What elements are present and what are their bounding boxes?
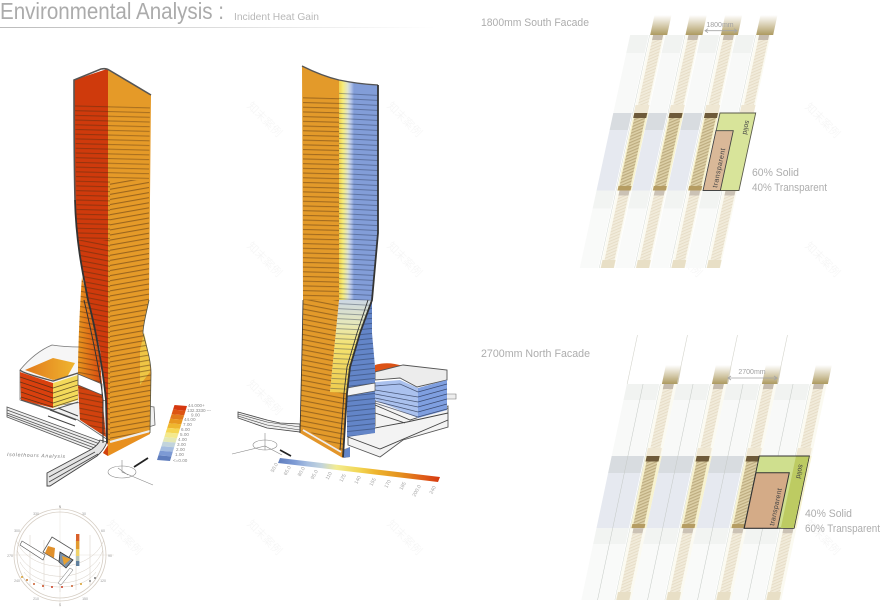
label: north solid: solid bbox=[794, 464, 804, 479]
right tower band bbox=[347, 383, 375, 396]
watermarks: 知末案例 bbox=[244, 377, 285, 418]
title block bbox=[0, 0, 435, 28]
legend labels: 2.00 bbox=[176, 447, 185, 452]
compass degree labels: 150 bbox=[82, 597, 88, 601]
legend labels: 1.00 bbox=[175, 452, 184, 457]
scale bar bbox=[278, 458, 440, 482]
solid area bbox=[703, 113, 756, 190]
lower red chunk bbox=[78, 385, 106, 437]
sun path dots bbox=[21, 576, 96, 588]
text: north percentages bbox=[805, 508, 880, 535]
legend labels: 132.3330 --- bbox=[187, 408, 211, 413]
watermarks: 知末案例 bbox=[244, 517, 285, 558]
base lip bbox=[103, 432, 150, 456]
scale labels bbox=[270, 462, 438, 498]
text: south percentages bbox=[752, 167, 827, 194]
watermarks: 知末案例 bbox=[104, 517, 145, 558]
right tower mid strip bbox=[330, 300, 372, 400]
compass degree labels: S bbox=[59, 603, 62, 607]
compass degree labels: N bbox=[59, 505, 62, 509]
left tower with podium bbox=[7, 69, 155, 486]
heading: south facade: 1800mm South Facade bbox=[481, 17, 589, 29]
compass degree labels: 210 bbox=[33, 597, 39, 601]
watermarks: 知末案例 bbox=[802, 239, 843, 280]
compass degree labels: 270 bbox=[7, 554, 13, 558]
scale labels: 50.0 bbox=[270, 462, 280, 474]
left legend bbox=[157, 403, 211, 463]
watermarks bbox=[104, 99, 843, 558]
scale labels: 95.0 bbox=[310, 469, 320, 481]
scale labels: 170 bbox=[384, 479, 393, 489]
transparent area bbox=[703, 131, 733, 190]
watermarks: 知末案例 bbox=[384, 239, 425, 280]
watermarks: 知末案例 bbox=[802, 517, 843, 558]
right colour scale bbox=[270, 458, 440, 498]
legend labels bbox=[173, 403, 211, 463]
yellow patch bbox=[140, 333, 150, 385]
legend labels: 9.00 bbox=[191, 412, 200, 418]
compass degree labels: 60 bbox=[101, 529, 105, 533]
dimension: 1800mm bbox=[705, 22, 737, 33]
text: south percentages: 60% Solid bbox=[752, 167, 799, 179]
sun path diagram bbox=[7, 505, 114, 607]
label: north transparent: transparent bbox=[769, 488, 784, 526]
right tower with podium bbox=[238, 66, 456, 458]
transparent area bbox=[744, 473, 789, 528]
heading: north facade: 2700mm North Facade bbox=[481, 348, 590, 360]
scale labels: 140 bbox=[354, 475, 363, 485]
legend labels: 6.00 bbox=[181, 427, 190, 432]
subtitle: Incident Heat Gain bbox=[234, 12, 319, 23]
right tower gradient strip bbox=[339, 80, 378, 300]
scale labels: 80.0 bbox=[297, 466, 307, 478]
legend labels: 3.00 bbox=[177, 442, 186, 447]
label: south solid: solid bbox=[741, 120, 750, 135]
compass degree labels: 240 bbox=[14, 579, 20, 583]
scale labels: 240 bbox=[429, 485, 438, 495]
title rule bbox=[0, 27, 435, 28]
text: north percentages: 40% Solid bbox=[805, 508, 852, 520]
legend labels: 7.00 bbox=[183, 422, 192, 427]
lower left tower chunk bbox=[78, 277, 102, 385]
right tower lower blue face bbox=[347, 300, 375, 437]
left caption: Isolethours Analysis bbox=[7, 452, 66, 460]
left podium block bbox=[20, 358, 78, 410]
scale labels: 110 bbox=[325, 471, 334, 481]
dimension: 2700mm bbox=[728, 369, 777, 380]
watermarks: 知末案例 bbox=[244, 99, 285, 140]
white band bbox=[78, 374, 102, 395]
scale labels: 185 bbox=[399, 481, 408, 491]
watermarks: 知末案例 bbox=[384, 517, 425, 558]
scale labels: 65.0 bbox=[283, 465, 293, 477]
legend labels: 5.00 bbox=[180, 432, 189, 437]
left compass bbox=[108, 458, 153, 485]
dimension: 1800mm: 1800mm bbox=[706, 22, 734, 29]
left podium and roads bbox=[7, 345, 155, 486]
panel: north facade modules bbox=[581, 335, 838, 600]
label: south transparent: transparent bbox=[712, 148, 727, 188]
compass degree labels bbox=[7, 505, 112, 607]
tower outlines bbox=[74, 69, 151, 443]
compass degree labels: 120 bbox=[100, 579, 106, 583]
site plan bbox=[20, 537, 73, 585]
solid darker strip bbox=[781, 456, 809, 528]
scale labels: 200.0 bbox=[412, 484, 423, 498]
left tower red face bbox=[74, 69, 110, 445]
floor lines bbox=[75, 103, 151, 440]
watermarks: 知末案例 bbox=[384, 99, 425, 140]
watermarks: 知末案例 bbox=[244, 239, 285, 280]
compass degree labels: 90 bbox=[108, 554, 112, 558]
right compass bbox=[232, 433, 291, 456]
right tower base lip bbox=[301, 428, 350, 458]
watermarks: 知末案例 bbox=[664, 239, 705, 280]
text: south percentages: 40% Transparent bbox=[752, 182, 827, 194]
solid area bbox=[744, 456, 809, 528]
legend labels: 44.00 bbox=[184, 417, 196, 422]
right tower floor lines bbox=[300, 92, 378, 452]
legend labels: 44.000+ bbox=[188, 403, 205, 408]
legend labels: 4.00 bbox=[178, 437, 187, 442]
scale labels: 125 bbox=[339, 473, 348, 483]
compass degree labels: 330 bbox=[33, 512, 39, 516]
sky dome rings bbox=[10, 505, 114, 607]
panel: south facade modules bbox=[580, 15, 777, 268]
right podium blue facade bbox=[375, 380, 456, 418]
right podium and road bbox=[238, 363, 448, 457]
compass degree labels: 30 bbox=[82, 512, 86, 516]
legend labels: <=0.00 bbox=[173, 458, 188, 463]
scale labels: 155 bbox=[369, 477, 378, 487]
watermarks: 知末案例 bbox=[802, 100, 843, 141]
right tower outlines bbox=[300, 66, 378, 457]
right tower orange face bbox=[300, 66, 347, 458]
sun diagram colour strip bbox=[76, 534, 79, 566]
compass degree labels: 300 bbox=[14, 529, 20, 533]
dimension: 2700mm: 2700mm bbox=[738, 369, 766, 376]
left tower orange face bbox=[108, 70, 151, 455]
legend bands bbox=[157, 405, 187, 461]
